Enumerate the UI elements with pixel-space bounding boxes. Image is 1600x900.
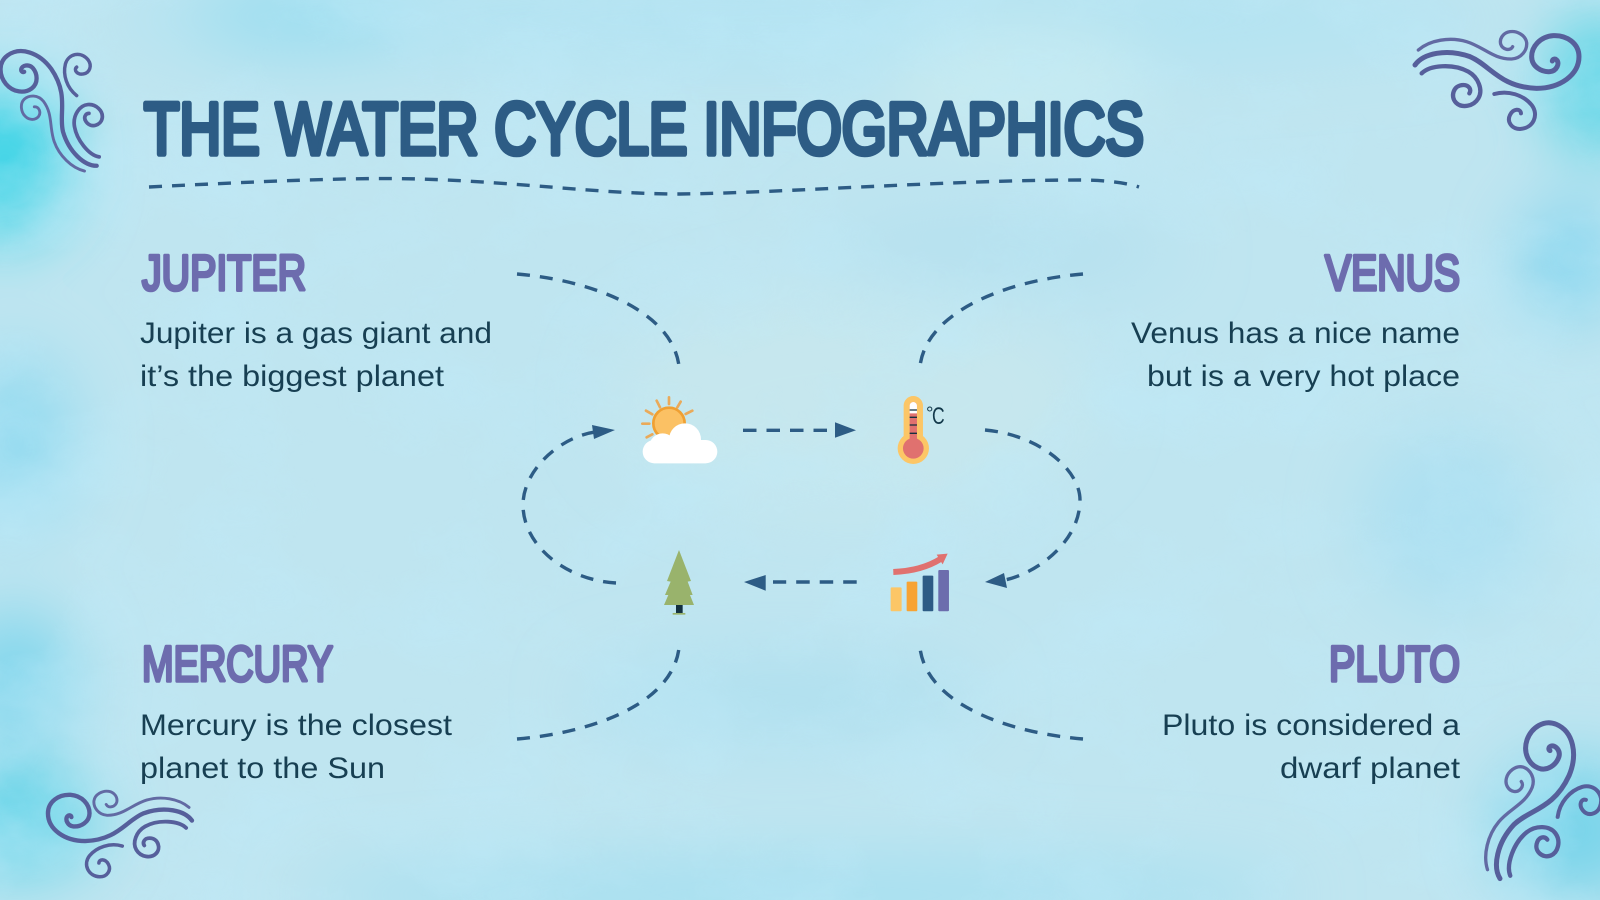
connector: Pluto to chart icon xyxy=(920,648,1083,739)
title: THE WATER CYCLE INFOGRAPHICS xyxy=(144,89,1144,170)
text: Jupiter description: Jupiter is a gas giant and xyxy=(140,317,492,350)
text: Jupiter description xyxy=(140,317,492,393)
icon: thermometer xyxy=(898,396,945,464)
panel: Venus xyxy=(1131,245,1460,393)
decoration: bottom-left swirl xyxy=(48,791,192,877)
title underline xyxy=(149,179,1139,194)
icon: bar chart with rising arrow xyxy=(891,554,949,611)
arrow: thermometer to chart xyxy=(985,430,1080,588)
heading: Jupiter: JUPITER xyxy=(142,245,306,301)
text: Pluto description xyxy=(1162,709,1461,785)
heading: Mercury: MERCURY xyxy=(142,636,333,692)
text: Mercury description: planet to the Sun xyxy=(140,752,385,785)
decoration: bottom-right swirl xyxy=(1469,715,1600,900)
decoration: top-right swirl xyxy=(1415,32,1579,129)
connector: Venus to thermometer icon xyxy=(920,274,1083,366)
text: Venus description: but is a very hot place xyxy=(1147,360,1460,393)
panel: Jupiter xyxy=(140,245,492,393)
text: Pluto description: Pluto is considered a xyxy=(1162,709,1460,742)
text: Venus description xyxy=(1131,317,1460,393)
arrow: chart to tree xyxy=(744,575,857,591)
heading: Pluto: PLUTO xyxy=(1329,636,1460,692)
text: Mercury description xyxy=(140,709,453,785)
text: Pluto description: dwarf planet xyxy=(1280,752,1461,785)
panel: Mercury xyxy=(140,636,453,785)
panel: Pluto xyxy=(1162,636,1461,785)
decoration: top-left swirl xyxy=(0,19,141,183)
text: Venus description: Venus has a nice name xyxy=(1131,317,1460,350)
icon: thermometer: C xyxy=(932,403,945,430)
icon: pine tree xyxy=(664,550,694,615)
connector: Mercury to tree icon xyxy=(517,648,679,739)
connector: Jupiter to sun icon xyxy=(517,274,679,366)
heading: Venus: VENUS xyxy=(1325,245,1460,301)
arrow: sun to thermometer xyxy=(743,422,856,438)
icon: sun and cloud xyxy=(642,397,717,463)
icon: thermometer: ° xyxy=(926,402,933,423)
text: Mercury description: Mercury is the closest xyxy=(140,709,453,742)
arrow: tree to sun xyxy=(523,425,616,583)
text: Jupiter description: it’s the biggest planet xyxy=(140,360,445,393)
